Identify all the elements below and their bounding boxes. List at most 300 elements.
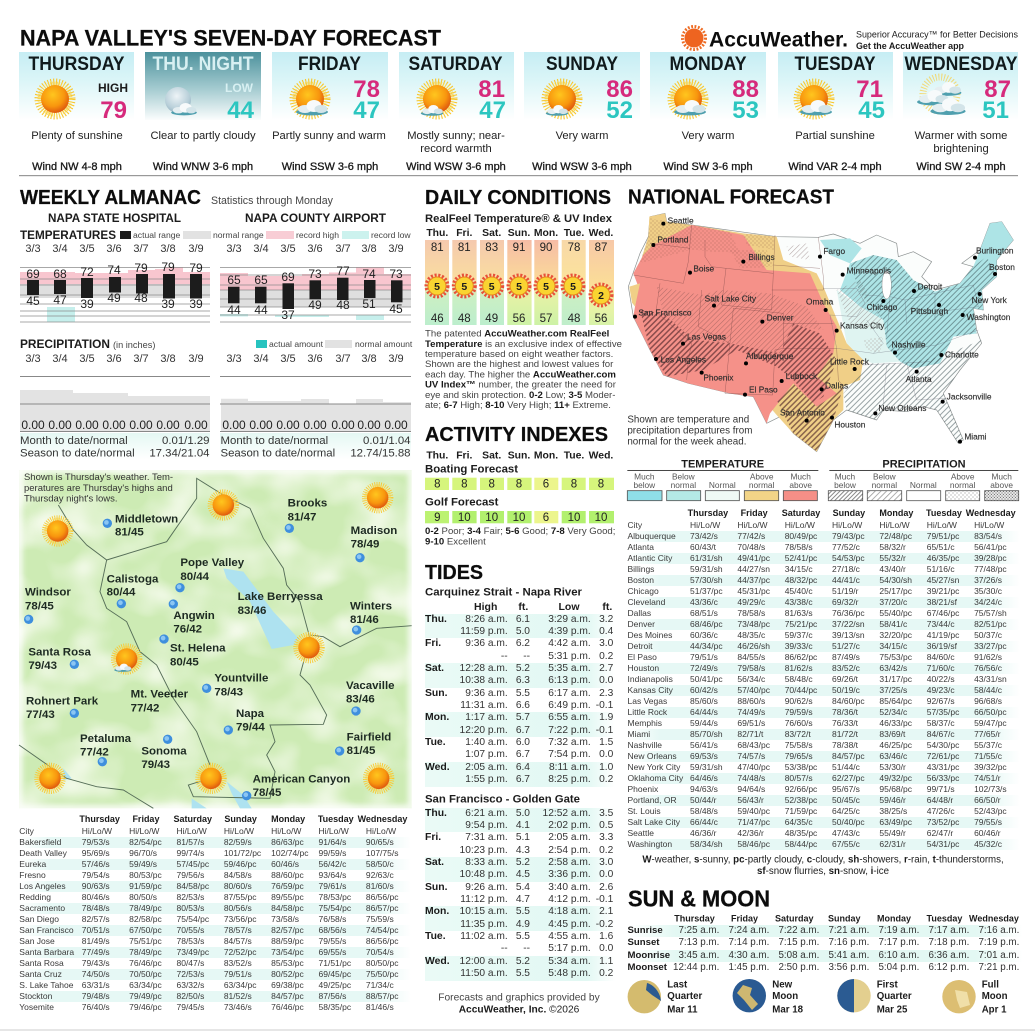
table: Golden Gate tides: 3.3 (599, 832, 613, 843)
table: national cities forecast: 56/33/pc (927, 773, 959, 783)
table: California cities forecast: 96/70/s (129, 848, 157, 858)
table: national cities forecast: Chicago (628, 586, 659, 596)
table: national cities forecast: Hi/Lo/W (690, 520, 720, 530)
table: Golden Gate tides: -- (501, 943, 508, 954)
table: national cities forecast: Thursday (688, 508, 728, 518)
table: national cities forecast: Boston (628, 575, 654, 585)
panel: national forecast (627, 185, 1019, 501)
day card: Saturday: 81 (478, 76, 505, 103)
date row: airport temperatures: 3/8 (361, 243, 377, 255)
table: California cities forecast: 68/56/s (319, 925, 346, 935)
table: Carquinez Strait tides: 3.2 (599, 614, 613, 624)
day card: Friday: Wind SSW 3-6 mph (282, 161, 378, 173)
table: national cities forecast: Albuquerque (628, 531, 676, 541)
table: California cities forecast: 70/55/s (176, 925, 204, 935)
table: Carquinez Strait tides: 8:25 p.m. (548, 774, 591, 785)
day card: Sunday: Very warm (556, 130, 608, 142)
table: California cities forecast: 63/31/s (82, 980, 110, 990)
table: national cities forecast: 76/60/s (785, 718, 813, 728)
tides column headers (474, 601, 612, 613)
day card: Thursday: THURSDAY (28, 54, 125, 75)
table: national cities forecast: 79/65/s (785, 751, 813, 761)
totals: airport: Season to date/normal (220, 448, 335, 460)
weekday labels: Thu. (426, 450, 448, 461)
moon phase: full moon: Moon (982, 991, 1008, 1002)
legend: precipitation: below (834, 480, 857, 490)
table: California cities forecast: 90/65/s (366, 837, 394, 847)
chart: hospital temperature ranges: 39 (189, 297, 203, 311)
legend: precipitation: Normal (910, 480, 937, 490)
chart: airport temperature ranges: 48 (336, 298, 350, 312)
table: Carquinez Strait tides: -- (501, 651, 508, 662)
table: California cities forecast: 88/60/pc (271, 870, 304, 880)
weekday labels: Tue. (564, 228, 584, 239)
legend: temperature: Normal (709, 480, 736, 490)
table: national cities forecast: 90/62/s (785, 696, 813, 706)
table: national cities forecast: 39/28/pc (974, 553, 1007, 563)
table: California cities forecast: Hi/Lo/W (129, 826, 159, 836)
table: California cities forecast: 70/54/s (366, 947, 394, 957)
icons: UV index suns: 5 (489, 281, 495, 293)
table: Carquinez Strait tides: 5.2 (516, 663, 530, 674)
table: California cities forecast: 79/53/s (82, 837, 110, 847)
table: California cities forecast: 49/25/pc (319, 980, 351, 990)
table: California cities forecast: 76/40/s (82, 1002, 110, 1012)
table: national cities forecast: Miami (628, 729, 650, 739)
date row: hospital precipitation: 3/4 (52, 353, 68, 365)
table: Carquinez Strait tides: 2:05 a.m. (465, 762, 508, 773)
table: national cities forecast: 79/51/s (690, 652, 718, 662)
table: California cities forecast: 79/54/s (82, 870, 110, 880)
table: California cities forecast: 84/58/pc (176, 881, 209, 891)
table: national cities forecast: 66/44/c (690, 817, 718, 827)
golf forecast: 10 (568, 512, 580, 524)
table: national cities forecast: 34/15/c (785, 564, 813, 574)
table: sunrise, sunset, moonrise and moonset times: 7:17 p.m. (878, 937, 919, 948)
table: California cities forecast: 79/61/s (319, 881, 346, 891)
table: national cities forecast: 51/27/c (832, 641, 860, 651)
date row: airport precipitation: 3/6 (307, 353, 323, 365)
table: national cities forecast: 41/19/pc (927, 630, 959, 640)
table: national cities forecast: 38/25/s (879, 806, 907, 816)
map note: Shown are temperature and (627, 415, 749, 426)
table: California cities forecast: 79/51/s (224, 969, 252, 979)
table: sunrise, sunset, moonrise and moonset times: 1:45 p.m. (728, 962, 769, 973)
table: national cities forecast: 59/37/c (785, 630, 813, 640)
table: California cities forecast: 80/53/s (176, 903, 204, 913)
table: California cities forecast: 70/51/s (82, 925, 110, 935)
date row: hospital precipitation: 3/3 (25, 353, 41, 365)
chart: RealFeel temperature columns: 90 (540, 242, 552, 254)
table: national cities forecast: 102/73/s (974, 784, 1007, 794)
day card: Thursday (19, 52, 134, 173)
table: sunrise, sunset, moonrise and moonset times: 7:19 p.m. (978, 937, 1019, 948)
panel: activity indexes (425, 423, 615, 547)
table: national cities forecast: 57/35/pc (927, 707, 959, 717)
chart: RealFeel temperature columns: 81 (431, 242, 444, 254)
table: California cities forecast: Los Angeles (19, 881, 66, 891)
table: Carquinez Strait tides: Fri. (425, 638, 441, 649)
chart: airport temperature ranges: 73 (308, 267, 322, 281)
day card: Saturday: Mostly sunny; near- (407, 130, 505, 142)
table: national cities forecast: 85/70/sh (690, 729, 723, 739)
explanatory text: ate; 6-7 High; 8-10 Very High; 11+ Extreme. (425, 400, 611, 411)
table: national cities forecast: St. Louis (628, 806, 661, 816)
golf forecast: 10 (595, 512, 607, 524)
table: national cities forecast: 71/47/pc (737, 817, 770, 827)
table: national cities forecast: 72/49/s (690, 663, 718, 673)
table: Carquinez Strait tides: 12:20 p.m. (460, 725, 508, 736)
legend: precipitation: Below (873, 472, 897, 482)
table: Carquinez Strait tides: 9:36 a.m. (465, 688, 508, 699)
city forecasts: 81/46 (350, 614, 379, 626)
day card: Saturday: record warmth (420, 143, 492, 155)
table: national cities forecast: 59/46/r (879, 795, 906, 805)
table: national cities forecast: 94/63/s (690, 784, 718, 794)
tides heading: TIDES (425, 562, 483, 584)
table: Golden Gate tides: 1.6 (599, 931, 613, 942)
table: California cities forecast: 82/57/s (82, 914, 110, 924)
chart: airport temperature ranges: 74 (362, 267, 376, 281)
table: national cities forecast: 45/27/sn (927, 575, 959, 585)
table: national cities forecast: 54/31/pc (927, 839, 959, 849)
precipitation legend (256, 339, 413, 349)
table: California cities forecast: 74/50/s (82, 969, 110, 979)
legend: precipitation: Much (991, 472, 1012, 482)
day card: Saturday: SATURDAY (408, 54, 503, 75)
city forecasts: 81/47 (288, 512, 316, 524)
date row: hospital temperatures: 3/3 (25, 243, 41, 255)
city forecasts: 80/45 (170, 656, 199, 668)
chart: hospital temperature ranges: 68 (53, 267, 67, 281)
table: Carquinez Strait tides: 1:40 a.m. (465, 737, 508, 748)
table: national cities forecast: 39/33/c (785, 641, 813, 651)
table: California cities forecast: 86/57/pc (366, 903, 398, 913)
city markers and labels: Omaha (806, 297, 834, 307)
table: California cities forecast: 80/46/s (82, 892, 110, 902)
city markers and labels: Las Vegas (687, 332, 726, 342)
table: Carquinez Strait tides: 5:31 p.m. (548, 651, 591, 662)
table: California cities forecast: Monday (271, 814, 305, 824)
table: Golden Gate tides: 5.5 (516, 931, 530, 942)
legend: precipitation: normal (950, 480, 976, 490)
table: national cities forecast: 59/31/sh (690, 564, 723, 574)
icon: AccuWeather sun (682, 26, 706, 50)
table: Golden Gate tides: 4.7 (516, 894, 530, 905)
city markers and labels: San Antonio (780, 408, 825, 418)
day card: Wednesday: brightening (933, 143, 989, 155)
chart: hospital precipitation: 0.00 (48, 418, 72, 432)
table: Carquinez Strait tides: 1.5 (599, 737, 613, 748)
weekday labels: Sun. (508, 228, 530, 239)
table: Golden Gate tides: 2.6 (599, 882, 613, 893)
table: national cities forecast: 45/32/c (974, 839, 1002, 849)
table: national cities forecast: 37/26/s (974, 575, 1002, 585)
table: national cities forecast: New York City (628, 762, 680, 772)
table: sunrise, sunset, moonrise and moonset times: 3:56 p.m. (828, 962, 869, 973)
day card: Sunday: 86 (606, 76, 633, 103)
weekday labels: Mon. (534, 450, 558, 461)
table: Golden Gate tides: -0.1 (596, 894, 613, 905)
city markers and labels: Seattle (668, 215, 694, 225)
table: national cities forecast: 64/48/r (927, 795, 953, 805)
table: Golden Gate tides: 4.3 (516, 845, 530, 856)
weekday labels: Thu. (426, 228, 448, 239)
table: California cities forecast: 78/48/s (82, 903, 110, 913)
table: national cities forecast: 87/49/s (832, 652, 860, 662)
table: national cities forecast: 46/36/r (690, 828, 716, 838)
table: California cities forecast: 99/74/s (176, 848, 204, 858)
table: national cities forecast: 50/45/c (832, 795, 860, 805)
chart: airport temperature ranges: 69 (281, 270, 295, 284)
table: national cities forecast: 45/40/c (785, 586, 813, 596)
moon phase: first quarter (837, 979, 912, 1016)
table: Golden Gate tides: 0.0 (599, 943, 613, 954)
chart: hospital temperature ranges: 74 (107, 263, 121, 277)
table: California cities forecast: 80/60/s (224, 881, 252, 891)
table: national cities forecast: 77/48/pc (974, 564, 1007, 574)
city markers and labels: Dallas (825, 380, 848, 390)
table: Carquinez Strait tides: 3:29 a.m. (548, 614, 591, 624)
date row: airport precipitation: 3/7 (335, 353, 351, 365)
table: national cities forecast: 51/44/c (832, 762, 860, 772)
heading: NATIONAL FORECAST (628, 185, 834, 208)
table: national cities forecast: 79/51/pc (927, 531, 959, 541)
city markers and labels (633, 215, 1015, 444)
table: national cities forecast: Hi/Lo/W (879, 520, 910, 530)
column headers: Wednesday (969, 914, 1019, 924)
table: Golden Gate tides: 5.0 (516, 808, 530, 818)
boating forecast: 8 (434, 478, 441, 490)
chart: hospital temperature ranges: 39 (80, 297, 94, 311)
tides credit: AccuWeather, Inc. ©2026 (459, 1005, 580, 1016)
temperature legend (120, 230, 411, 240)
chart: airport temperature ranges: 51 (362, 297, 376, 311)
table: California cities forecast: 84/57/pc (271, 991, 304, 1001)
day card: Thursday night: Clear to partly cloudy (150, 130, 256, 142)
day card: Thursday night (145, 52, 261, 173)
moon phase: first quarter: First (877, 980, 898, 991)
golf forecast: 10 (458, 512, 471, 524)
table: Golden Gate tides: 5:34 a.m. (548, 956, 591, 967)
day card: Thursday night: LOW (225, 81, 254, 95)
icons: UV index suns: 5 (516, 281, 522, 293)
table: California cities forecast: 95/69/s (82, 848, 110, 858)
table: California cities forecast (19, 814, 408, 1012)
chart: airport precipitation (220, 376, 411, 432)
table: national cities forecast: 58/44/c (974, 685, 1002, 695)
city forecasts: 78/43 (214, 686, 243, 698)
city forecasts: 77/42 (131, 703, 159, 715)
table: national cities forecast: 84/57/pc (832, 751, 865, 761)
table: California cities forecast: 82/59/s (224, 837, 252, 847)
table: national cities forecast: 37/22/sn (832, 619, 865, 629)
table: California cities forecast: 80/53/pc (129, 870, 162, 880)
table: Golden Gate tides: 2:58 a.m. (548, 857, 591, 868)
chart: airport temperature ranges: 73 (389, 267, 403, 281)
table: Golden Gate tides: Mon. (425, 906, 449, 917)
table: Carquinez Strait tides: 2.7 (599, 663, 613, 674)
table: Golden Gate tides: 4:55 a.m. (548, 931, 591, 942)
table: California cities forecast: 87/55/pc (224, 892, 256, 902)
legend: precipitation: Much (835, 472, 856, 482)
column headers: Friday (731, 914, 758, 924)
table: California cities forecast: Bakersfield (19, 837, 61, 847)
explanatory text: Shown are the highest and lowest values for (425, 359, 614, 370)
app prompt: Get the AccuWeather app (856, 41, 964, 51)
table: Carquinez Strait tides (425, 614, 613, 787)
table: national cities forecast: 39/21/pc (927, 586, 959, 596)
day card: Thursday: Plenty of sunshine (31, 130, 123, 142)
city forecasts: 80/44 (180, 571, 210, 583)
totals: hospital (20, 433, 210, 460)
table: California cities forecast: 76/59/pc (271, 881, 304, 891)
table: national cities forecast: Monday (879, 508, 913, 518)
city markers and labels: Los Angeles (661, 355, 706, 365)
great lakes (882, 271, 891, 299)
column headers: Thursday (674, 914, 715, 924)
date row: hospital temperatures (25, 243, 204, 255)
boating forecast: 8 (461, 478, 468, 490)
table: national cities forecast: 44/41/c (832, 575, 860, 585)
table: national cities forecast: 68/46/pc (690, 619, 723, 629)
city forecasts: 79/43 (141, 759, 170, 771)
city forecasts: 79/43 (28, 660, 57, 672)
table: national cities forecast: 49/32/pc (879, 773, 912, 783)
city forecasts: 83/46 (238, 605, 266, 617)
table: California cities forecast: 80/47/s (176, 958, 204, 968)
city markers and labels: Nashville (892, 339, 926, 349)
day card: Monday: MONDAY (670, 54, 747, 75)
table: national cities forecast: 38/21/sf (927, 597, 957, 607)
table: national cities forecast: 63/46/c (879, 751, 907, 761)
tides: San Francisco title: San Francisco - Golden Gate (425, 793, 580, 805)
chart: hospital precipitation: 0.00 (75, 418, 99, 432)
table: sunrise, sunset, moonrise and moonset times: 7:16 a.m. (978, 925, 1019, 936)
map note (24, 472, 173, 505)
table: California cities forecast: 70/50/pc (129, 969, 162, 979)
table: national cities forecast: Hi/Lo/W (974, 520, 1004, 530)
table: California cities forecast: 101/72/pc (224, 848, 261, 858)
city forecasts: St. Helena (170, 643, 226, 655)
table: national cities forecast: 43/36/c (690, 597, 718, 607)
city forecasts: Winters (350, 600, 392, 612)
brand: AccuWeather logo and tagline (682, 26, 1018, 52)
table: national cities forecast: 64/35/c (785, 817, 813, 827)
table: national cities forecast: 58/37/c (927, 718, 955, 728)
explanatory text: each day. The higher the AccuWeather.com (425, 369, 616, 380)
explanatory text: UV Index™ number, the greater the need for (425, 380, 617, 391)
table: national cities forecast: Atlanta (628, 542, 654, 552)
legend: temperature: below (633, 480, 656, 490)
table: California cities forecast: 79/55/s (319, 936, 346, 946)
table: national cities forecast: 78/38/t (832, 740, 858, 750)
table: Golden Gate tides: 10:15 a.m. (460, 906, 508, 917)
table: Carquinez Strait tides: 8:26 a.m. (465, 614, 508, 624)
day card: Friday (272, 52, 388, 173)
table: Golden Gate tides: 11:02 a.m. (460, 931, 508, 942)
table: sunrise, sunset, moonrise and moonset times: 6:10 a.m. (878, 950, 919, 961)
chart: RealFeel temperature columns (425, 240, 614, 325)
table: national cities forecast: 62/27/pc (832, 773, 865, 783)
table: California cities forecast: 77/49/s (82, 947, 110, 957)
table: national cities forecast: Oklahoma City (628, 773, 683, 783)
day card: Tuesday (778, 52, 893, 173)
city forecasts: 80/44 (107, 587, 136, 599)
table: national cities forecast: 74/51/r (974, 773, 1001, 783)
totals: airport: 0.01/1.04 (363, 435, 410, 447)
table: California cities forecast: 78/53/pc (319, 892, 351, 902)
map base (19, 470, 412, 808)
table: national cities forecast: 42/36/r (737, 828, 764, 838)
table: Golden Gate tides: 3:40 a.m. (548, 882, 591, 893)
table: national cities forecast: Saturday (782, 508, 820, 518)
table: Golden Gate tides: 1.1 (599, 956, 613, 967)
date row: airport temperatures: 3/6 (307, 243, 323, 255)
table: California cities forecast: Hi/Lo/W (271, 826, 301, 836)
chart: hospital temperature ranges: 45 (26, 294, 40, 308)
day card: Saturday: 47 (479, 97, 506, 124)
table: national cities forecast: 59/40/pc (737, 806, 770, 816)
table: Golden Gate tides: 7:31 a.m. (465, 832, 508, 843)
table: national cities forecast: 46/35/pc (927, 553, 959, 563)
table: Carquinez Strait tides: Sat. (425, 663, 444, 674)
table: national cities forecast: Hi/Lo/W (737, 520, 768, 530)
table: national cities forecast: 56/43/r (737, 795, 764, 805)
table: national cities forecast: 67/55/c (832, 839, 860, 849)
table: California cities forecast: 75/54/pc (176, 914, 209, 924)
table: California cities forecast: 57/46/s (82, 859, 110, 869)
table: national cities forecast: 50/37/c (974, 630, 1002, 640)
table: national cities forecast: Las Vegas (628, 696, 667, 706)
table: California cities forecast: 57/45/pc (176, 859, 209, 869)
map note: normal for the week ahead. (627, 436, 746, 447)
date row: hospital temperatures: 3/9 (188, 243, 204, 255)
boating forecast: Boating Forecast (425, 463, 518, 475)
table: Golden Gate tides: Wed. (425, 956, 450, 967)
table: sunrise, sunset, moonrise and moonset times: 3:45 a.m. (678, 950, 719, 961)
chart: airport temperature ranges: 45 (389, 302, 403, 316)
table: national cities forecast: 91/62/s (974, 652, 1002, 662)
moon phase: new moon: New (772, 980, 793, 991)
table: California cities forecast: 88/57/pc (366, 991, 398, 1001)
table: Golden Gate tides: 4.5 (516, 869, 530, 880)
city forecasts: 78/45 (253, 787, 282, 799)
day card: Monday (650, 52, 766, 173)
table: national cities forecast: Hi/Lo/W (832, 520, 862, 530)
moon phase: new moon: Moon (772, 991, 798, 1002)
table: sunrise, sunset, moonrise and moonset times: 7:15 p.m. (778, 937, 819, 948)
city markers and labels: El Paso (749, 384, 778, 394)
table: Carquinez Strait tides: 0.4 (599, 626, 613, 637)
table: California cities forecast: 91/64/s (319, 837, 346, 847)
table: national cities forecast: 84/67/c (927, 729, 955, 739)
table: Golden Gate tides: 10:48 p.m. (460, 869, 508, 880)
chart: RealFeel temperature columns: 48 (568, 313, 580, 325)
city markers and labels: Atlanta (906, 374, 932, 384)
table: national cities forecast: 43/40/r (879, 564, 906, 574)
table: Carquinez Strait tides: 0.2 (599, 774, 613, 785)
table: California cities forecast: 86/56/pc (366, 936, 398, 946)
table: national cities forecast: 80/57/s (785, 773, 813, 783)
table: national cities forecast: 65/51/c (927, 542, 955, 552)
day card: Thursday night: Wind WNW 3-6 mph (153, 161, 253, 173)
chart: RealFeel temperature columns: 78 (568, 242, 580, 254)
city markers and labels: Boise (693, 264, 715, 274)
boating forecast: 8 (571, 478, 577, 490)
totals: hospital: Month to date/normal (20, 435, 128, 447)
table: Golden Gate tides: -- (523, 943, 530, 954)
